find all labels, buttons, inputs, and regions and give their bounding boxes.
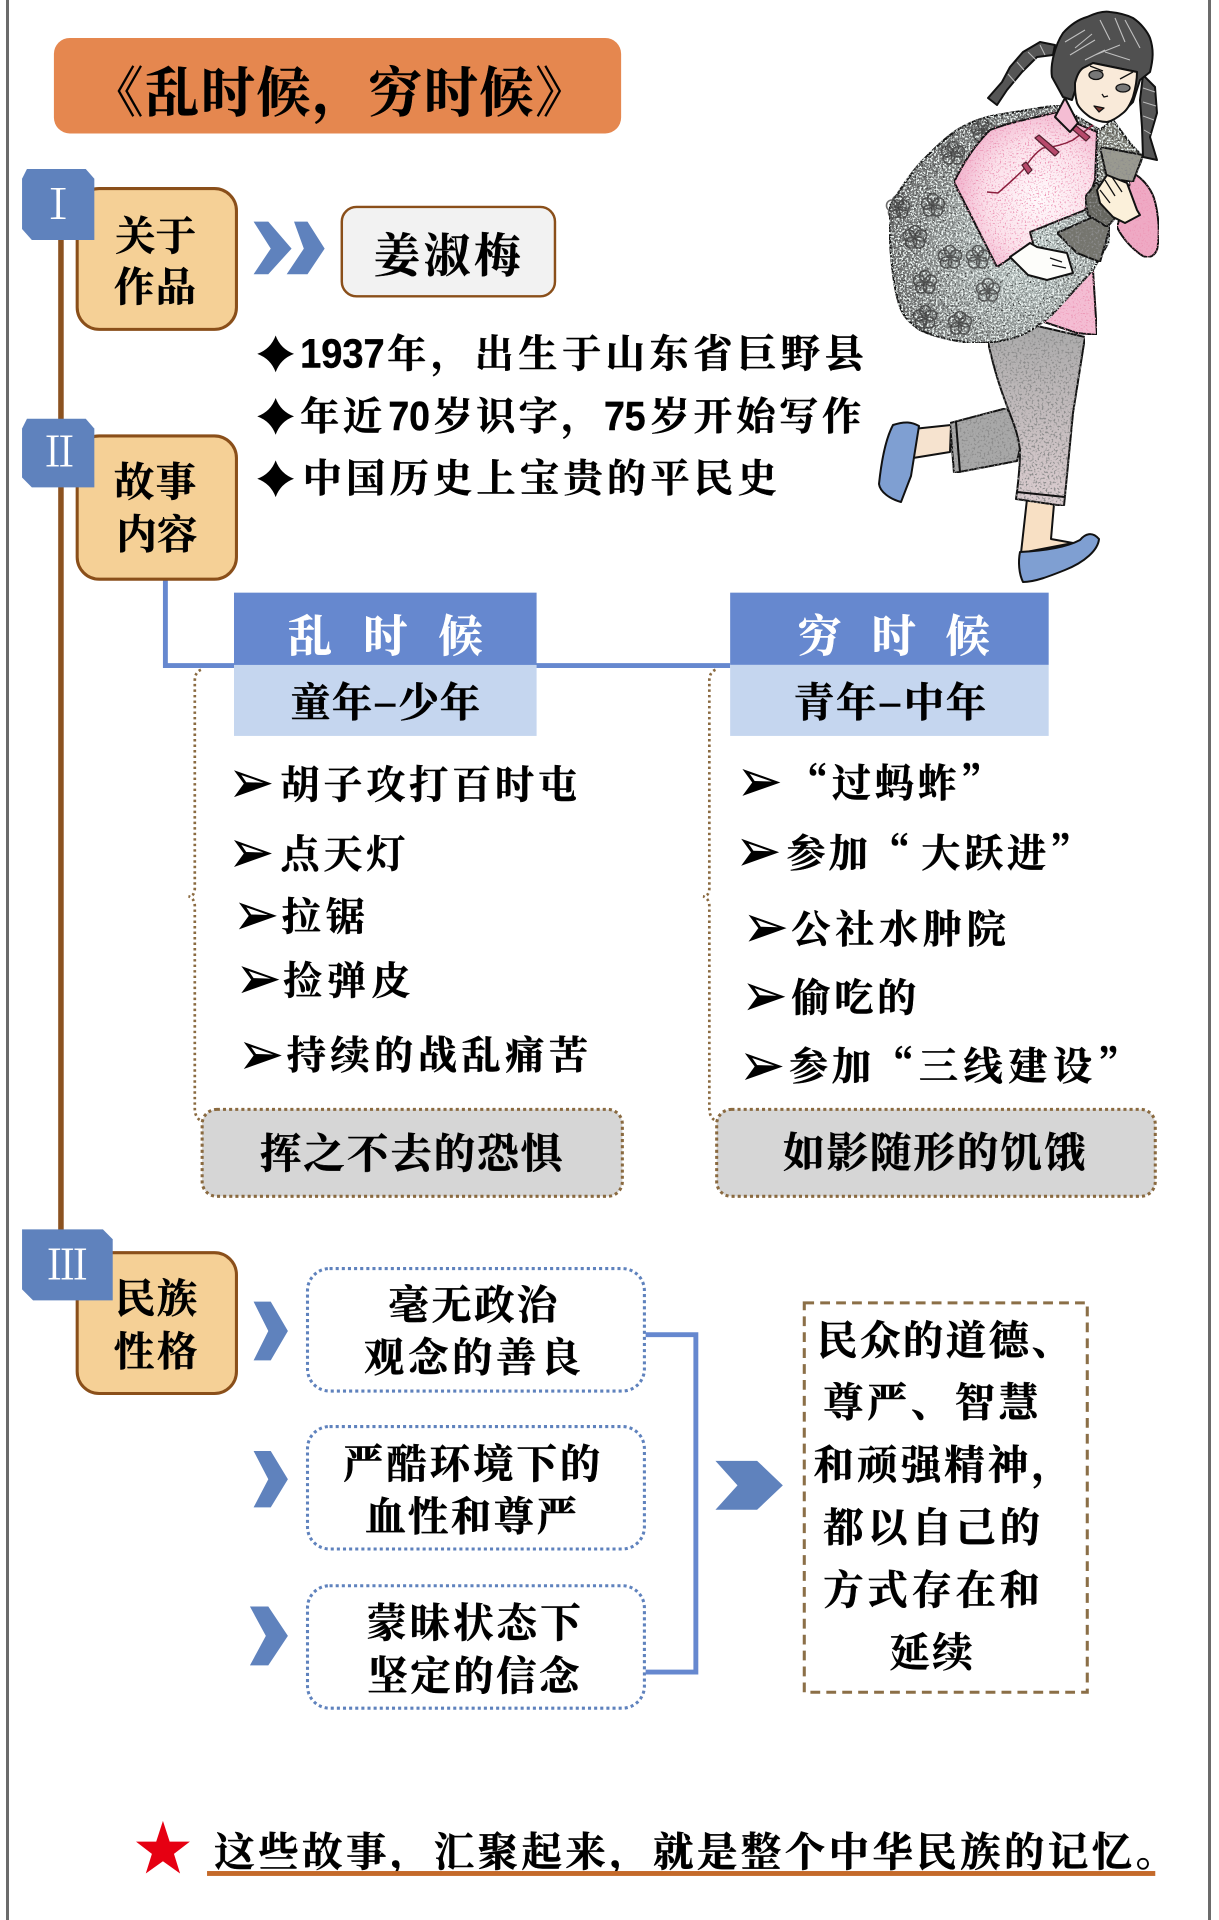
event list: 偷吃的: [791, 967, 916, 1023]
jacket hem: [1032, 270, 1097, 335]
collar: [1055, 98, 1078, 132]
author facts: 年，出生于山东省巨野县: [387, 323, 865, 379]
event list: [741, 753, 1137, 1092]
summary: fear: 挥之不去的恐惧: [260, 1120, 565, 1180]
conclusion box: 延续: [889, 1620, 975, 1679]
upper shawl: [1097, 120, 1143, 182]
section badge I: Ⅰ: [37, 171, 79, 231]
event list: 持续的战乱痛苦: [287, 1025, 588, 1081]
timeline trunk: [58, 233, 64, 1237]
category box: 性格: [114, 1318, 197, 1377]
icon: red star: [136, 1821, 190, 1873]
trait: dignity: 严酷环境下的: [343, 1431, 600, 1490]
category box: [77, 189, 236, 329]
sack flowers: [886, 118, 1000, 334]
column: chaotic times: [189, 593, 622, 1196]
conclusion box: 民众的道德、: [817, 1307, 1072, 1366]
front leg and shoe: [1019, 499, 1099, 582]
event list: 三线建设”: [919, 1036, 1137, 1092]
author facts: 年近: [300, 386, 382, 442]
brace: [189, 670, 203, 1122]
trait: faith: 蒙昧状态下: [366, 1590, 581, 1649]
illustration: girl carrying a sack: [879, 12, 1159, 582]
section badge II: [22, 419, 94, 487]
event list: 参加“: [787, 823, 910, 879]
hair: [1052, 12, 1153, 110]
category box: 关于: [115, 203, 196, 262]
category box: [77, 436, 236, 579]
age band: 青年–中年: [794, 669, 986, 728]
category box: 故事: [114, 449, 196, 508]
category box: 内容: [116, 502, 197, 561]
event list: 拉锯: [282, 887, 365, 943]
section III: national character: [22, 1229, 1087, 1708]
author facts: 中国历史上宝贵的平民史: [303, 448, 777, 504]
section badge III: [22, 1229, 113, 1300]
author facts: 70: [388, 393, 430, 439]
section badge II: Ⅱ: [39, 419, 80, 479]
event list: 胡子攻打百时屯: [281, 754, 577, 810]
trait: dignity: [308, 1427, 644, 1549]
author facts: [257, 323, 865, 504]
event list: 公社水肿院: [791, 899, 1006, 955]
heading: 乱时候: [288, 600, 483, 664]
summary: hunger: [717, 1109, 1155, 1196]
jacket and near sleeve: [954, 112, 1097, 267]
gathered cloth: [1057, 217, 1110, 262]
conclusion box: 和顽强精神，: [813, 1432, 1072, 1491]
trait: faith: [308, 1586, 644, 1708]
jacket fastenings: [987, 120, 1093, 193]
heading: [730, 593, 1049, 665]
brace: [703, 670, 718, 1122]
trait: faith: 坚定的信念: [368, 1643, 582, 1702]
left braid: [988, 42, 1055, 105]
conclusion box: 都以自己的: [823, 1495, 1040, 1554]
age band: 童年–少年: [290, 669, 480, 728]
event list: 点天灯: [281, 824, 406, 880]
underline: [207, 1871, 1155, 1876]
big chevron: [715, 1461, 783, 1510]
trait: dignity: 血性和尊严: [365, 1484, 577, 1543]
trait: kindness: [308, 1269, 644, 1391]
summary: hunger: 如影随形的饥饿: [783, 1119, 1088, 1179]
far sleeve: [1117, 173, 1159, 257]
age band: [730, 665, 1049, 736]
summary: fear: [202, 1109, 622, 1196]
near hand: [1010, 243, 1073, 280]
heading: 穷时候: [798, 600, 990, 664]
event list: 参加“: [789, 1036, 914, 1092]
heading: [234, 593, 537, 665]
held cloth: [1100, 147, 1143, 182]
knot: [1085, 182, 1118, 227]
right braid: [1140, 75, 1157, 160]
trousers: [988, 325, 1085, 506]
event list: “过蚂蚱”: [789, 753, 1000, 809]
age band: [234, 665, 537, 736]
trait: kindness: 毫无政治: [388, 1272, 561, 1331]
category box: 作品: [114, 254, 196, 313]
category box: 民族: [115, 1266, 197, 1325]
double chevron: [254, 222, 325, 274]
author facts: 1937: [300, 330, 385, 376]
author facts: 75: [604, 393, 646, 439]
section badge III: Ⅲ: [47, 1232, 88, 1292]
event list: [234, 754, 588, 1081]
author facts: 岁识字，: [434, 386, 600, 442]
rear leg: [879, 408, 1022, 502]
title banner: 《乱时候，穷时候》: [89, 50, 589, 127]
sack: [886, 105, 1110, 343]
author box: [342, 207, 555, 296]
section II: story content: [22, 419, 1155, 1196]
column: poor times: [703, 593, 1155, 1196]
closing text: 这些故事，汇聚起来，就是整个中华民族的记忆。: [214, 1819, 1176, 1878]
section badge I: [22, 169, 94, 240]
bracket connector: [646, 1335, 696, 1672]
event list: 大跃进”: [921, 823, 1089, 879]
face: [1075, 63, 1137, 122]
trait: kindness: 观念的善良: [364, 1324, 581, 1383]
conclusion box: 尊严、智慧: [823, 1370, 1040, 1429]
conclusion box: 方式存在和: [823, 1557, 1040, 1616]
eyes, eyebrows, mouth: [1089, 66, 1133, 112]
section I: about the work: [22, 169, 865, 504]
closing statement: [136, 1819, 1176, 1878]
event list: 捡弹皮: [283, 950, 410, 1006]
author box: 姜淑梅: [374, 219, 521, 286]
category box: [77, 1253, 236, 1393]
connector: [165, 579, 730, 666]
far hand: [1097, 175, 1140, 223]
chevrons: [250, 1302, 288, 1665]
author facts: 岁开始写作: [651, 386, 861, 442]
conclusion box: [804, 1303, 1087, 1692]
